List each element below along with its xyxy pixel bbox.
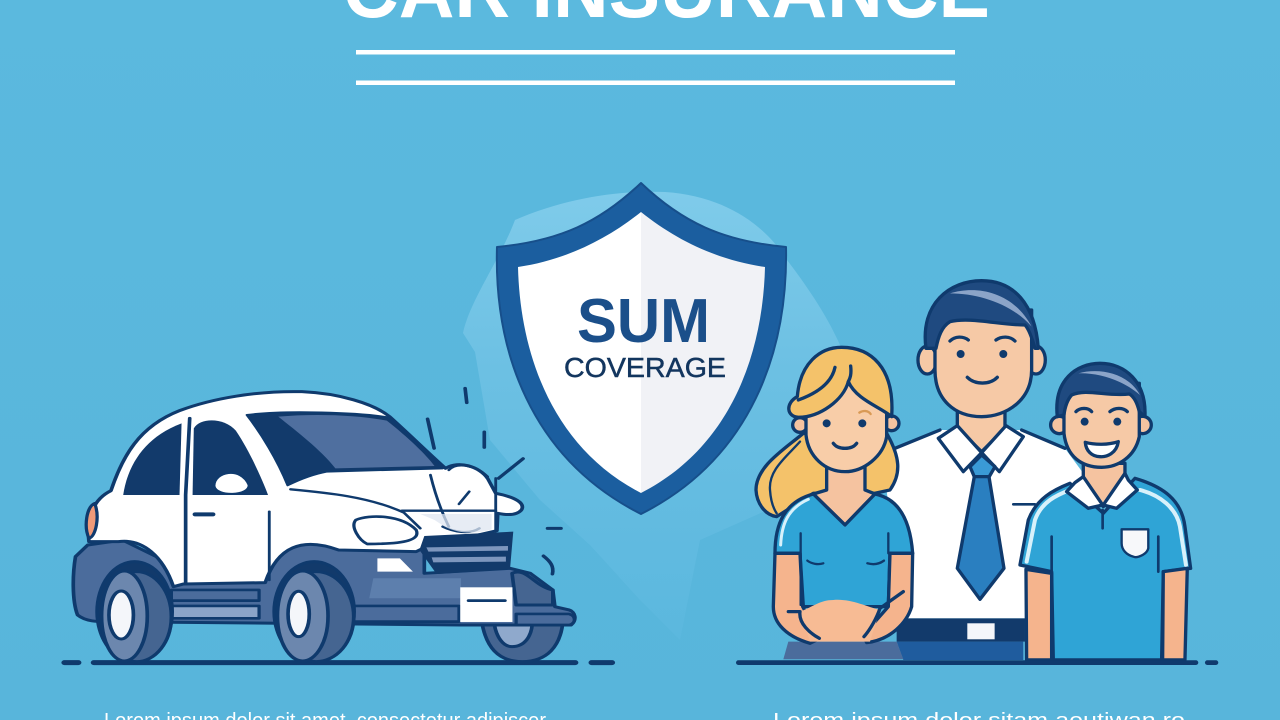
car body — [88, 392, 522, 587]
boy pocket — [1122, 529, 1148, 557]
man — [887, 281, 1083, 660]
bumper trim — [345, 572, 574, 625]
boy arms — [1026, 568, 1187, 660]
man ears — [918, 346, 1045, 374]
shield word SUM: SUM — [577, 287, 710, 356]
man belt buckle — [967, 623, 995, 639]
boy — [1020, 363, 1191, 660]
tail light — [86, 503, 97, 538]
licence plate — [460, 587, 512, 622]
shield border — [497, 183, 786, 514]
man neck — [957, 410, 1005, 452]
woman hands — [800, 600, 880, 642]
shield — [497, 183, 786, 514]
hood crumple lines — [290, 465, 496, 532]
woman neck — [813, 467, 875, 525]
woman fingers — [788, 592, 903, 638]
windshield reflection — [278, 415, 435, 468]
family ground line — [738, 656, 1216, 670]
impact marks — [428, 388, 561, 574]
far front wheel — [481, 620, 563, 662]
man collar — [938, 426, 1023, 472]
man hair — [925, 281, 1038, 348]
lower body — [73, 537, 575, 625]
shield word COVERAGE: COVERAGE — [564, 352, 726, 383]
woman top — [775, 494, 913, 607]
shield face left — [518, 212, 641, 493]
woman arms — [773, 553, 913, 643]
windshield — [247, 412, 443, 485]
boy hair — [1057, 363, 1145, 417]
woman hair strand — [798, 366, 851, 400]
ground line — [64, 655, 612, 670]
shield face right — [641, 212, 765, 493]
woman chest marks — [801, 533, 888, 605]
woman skirt — [783, 642, 903, 659]
man face — [935, 310, 1032, 417]
man shoulder lines — [895, 430, 1065, 448]
door pillars and handle — [186, 418, 269, 583]
side sill — [167, 590, 259, 618]
door window — [193, 420, 268, 495]
man shirt pocket line — [1013, 500, 1035, 508]
woman top highlight — [781, 499, 808, 545]
man hair highlight — [950, 290, 1032, 327]
boy neck — [1083, 463, 1125, 507]
boy face details — [1076, 408, 1127, 457]
boy placket and seams — [1052, 510, 1158, 572]
woman front hair — [789, 347, 892, 417]
grille — [419, 532, 513, 574]
boy collar — [1067, 473, 1137, 508]
boy face — [1064, 383, 1139, 467]
headlight — [354, 517, 417, 544]
woman — [756, 347, 913, 659]
man pants — [897, 642, 1023, 660]
title underlines — [356, 50, 955, 85]
woman back hair — [756, 433, 898, 517]
man face details — [950, 337, 1015, 383]
rear side window — [123, 423, 182, 495]
fog light — [377, 558, 413, 572]
woman ears — [793, 416, 899, 432]
front wheel — [274, 562, 354, 662]
woman face details — [824, 411, 871, 448]
boy ears — [1051, 416, 1151, 434]
man belt — [897, 618, 1025, 642]
boy sleeve trim — [1027, 490, 1186, 565]
boy shirt — [1020, 478, 1191, 660]
rear wheel — [97, 562, 172, 662]
crushed hood shade — [420, 514, 492, 533]
man tie — [957, 455, 1004, 599]
man shirt — [887, 430, 1083, 618]
woman face — [806, 383, 887, 472]
wing mirror — [214, 473, 249, 494]
boy hair highlight — [1078, 371, 1140, 395]
light glow behind shield — [463, 192, 850, 640]
woman hair inner strand — [770, 442, 800, 513]
car illustration — [64, 388, 612, 663]
family illustration — [738, 281, 1216, 663]
